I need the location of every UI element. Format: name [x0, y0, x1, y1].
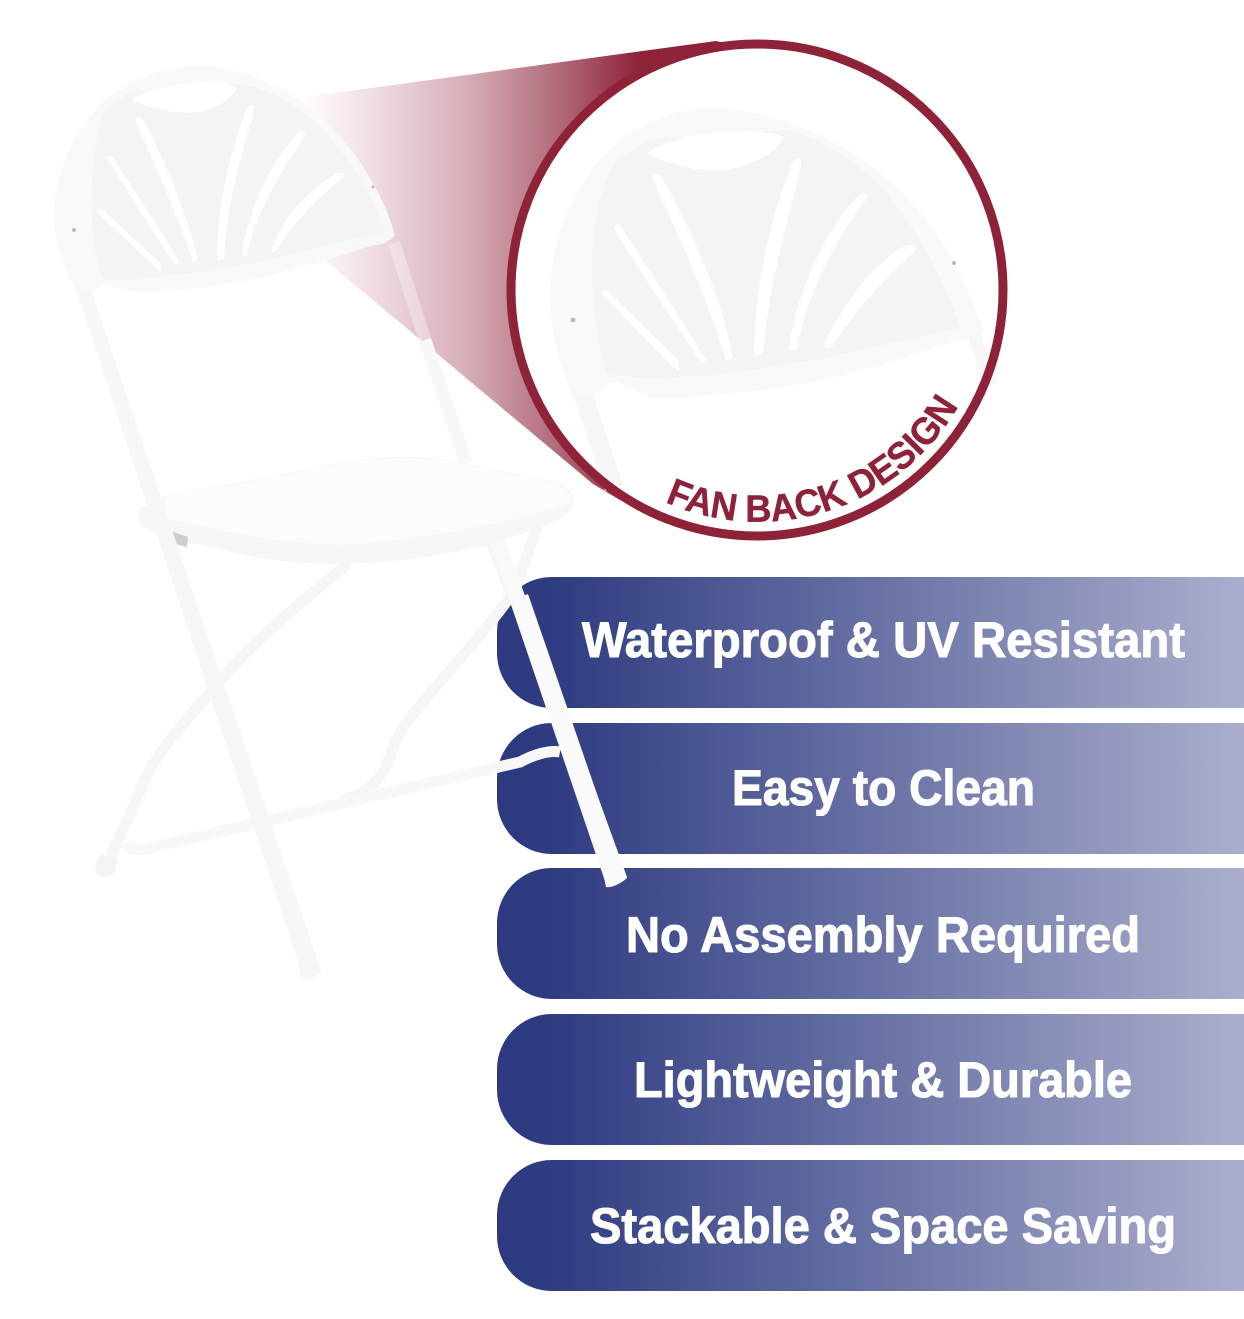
bar: stackable	[497, 1160, 1244, 1291]
circle ring	[511, 44, 1003, 536]
curved label: FAN BACK DESIGN	[666, 394, 958, 522]
enlarged handle hole	[647, 131, 784, 170]
right leg	[489, 535, 627, 887]
rear crossing legs	[107, 530, 536, 865]
bar: waterproof	[497, 577, 1244, 708]
circle fill	[511, 44, 1003, 536]
backrest panel	[92, 84, 385, 279]
backrest	[54, 66, 395, 293]
enlarged chair screws	[570, 261, 956, 322]
zoom cone gradient	[298, 41, 800, 500]
backrest screws	[72, 186, 374, 232]
bar: waterproof: Waterproof & UV Resistant	[582, 612, 1185, 668]
bar: easy to clean: Easy to Clean	[732, 760, 1035, 816]
right leg over bars	[512, 594, 627, 887]
feature bars	[497, 577, 1244, 1291]
rear foot cap	[95, 854, 118, 876]
back upright translucent	[388, 241, 431, 342]
bar: no assembly: No Assembly Required	[626, 907, 1140, 963]
enlarged chair legs	[583, 335, 991, 488]
bar: stackable: Stackable & Space Saving	[590, 1198, 1176, 1254]
seat	[137, 457, 573, 564]
bar: lightweight: Lightweight & Durable	[634, 1052, 1132, 1108]
enlarged backrest	[550, 108, 984, 398]
seat top surface	[165, 458, 571, 545]
enlarged backrest panel	[592, 130, 960, 378]
hinge	[168, 530, 188, 547]
left leg	[77, 290, 322, 979]
foot bar	[125, 751, 560, 849]
folding chair	[54, 66, 627, 979]
bar: lightweight	[497, 1014, 1244, 1145]
handle hole	[131, 82, 237, 113]
fan slots	[96, 105, 344, 271]
back upright lower	[419, 338, 473, 465]
enlarged fan slots	[601, 158, 916, 371]
bar: no assembly	[497, 868, 1244, 999]
zoom circle callout	[506, 40, 1008, 540]
bar: easy to clean	[497, 723, 1244, 854]
